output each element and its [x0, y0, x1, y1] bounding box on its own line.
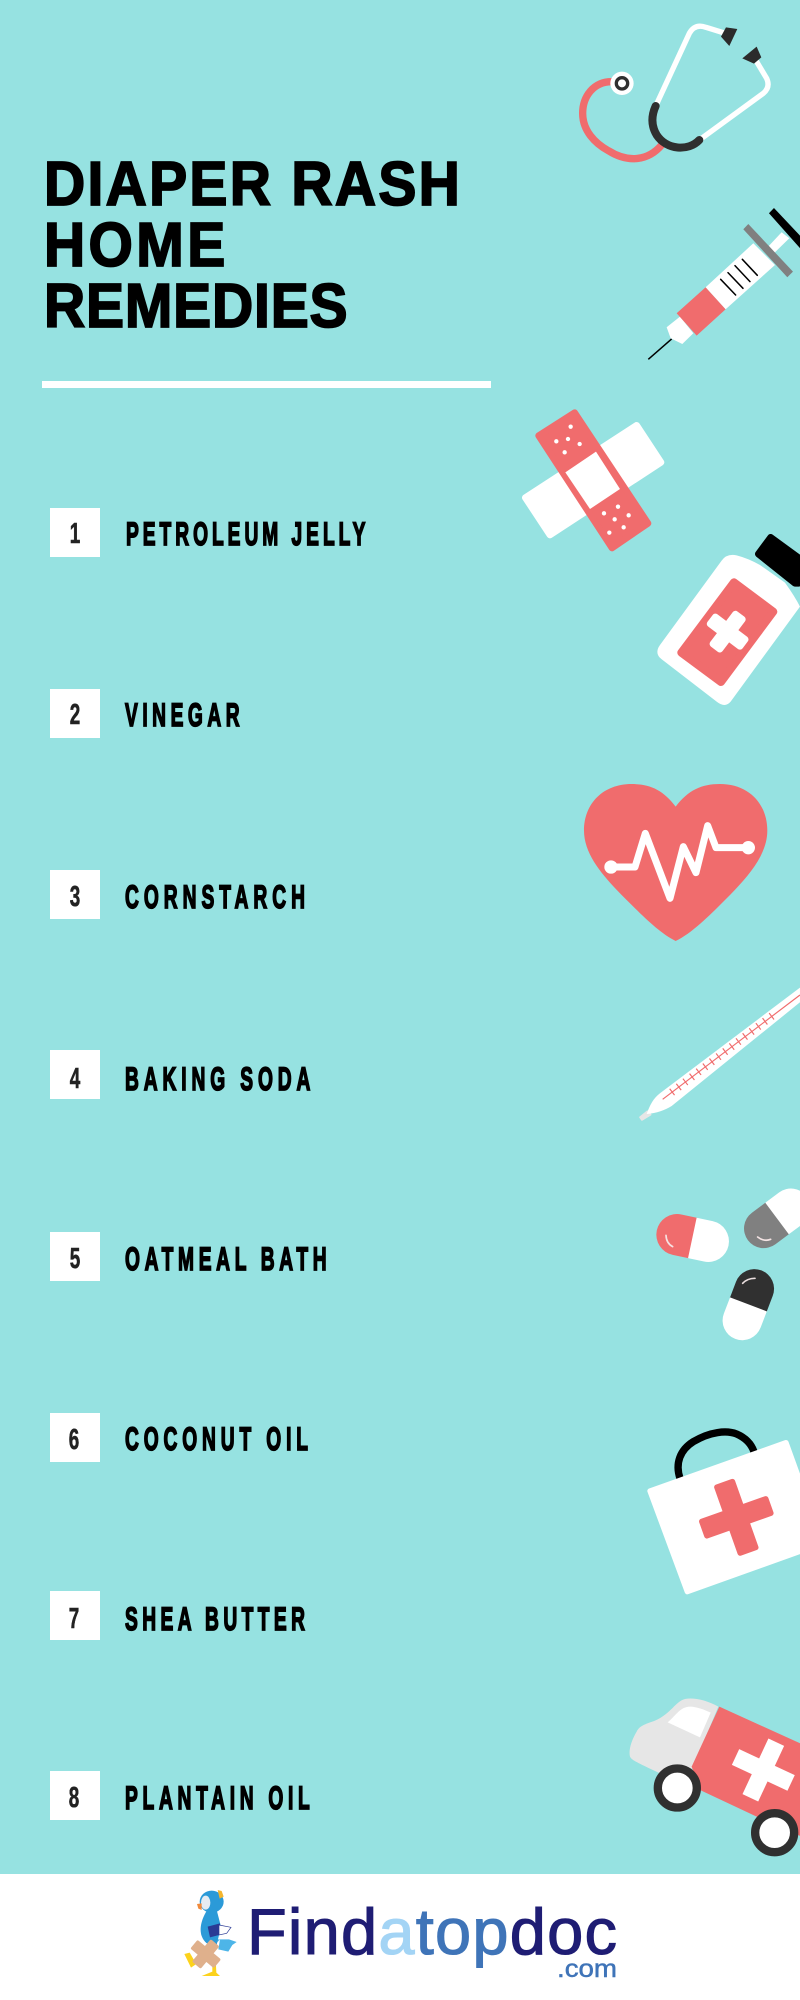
pill: grey and white: [736, 1181, 800, 1256]
list item 4: 4: [70, 1063, 81, 1095]
icon: bandage: [525, 413, 661, 548]
pill: red and white: [652, 1210, 733, 1266]
title: REMEDIES: [44, 271, 348, 341]
pill highlight: black: [743, 1278, 755, 1283]
title: HOME: [44, 210, 225, 280]
list item 8: PLANTAIN OIL: [125, 1780, 310, 1816]
list item 1: [50, 508, 366, 557]
list item 4: BAKING SODA: [125, 1061, 310, 1097]
icon: stethoscope: [583, 26, 768, 159]
list item 7: SHEA BUTTER: [125, 1601, 305, 1637]
icon: medicine bottle: [657, 537, 800, 705]
pill: black and white: [717, 1263, 780, 1346]
pill highlight: red: [666, 1235, 673, 1247]
list item 3: [50, 870, 305, 919]
list item 8: [50, 1771, 310, 1820]
list item 7: [50, 1591, 305, 1640]
list item 5: [50, 1232, 327, 1281]
list item 8: 8: [69, 1782, 79, 1814]
list item 2: 2: [70, 699, 80, 731]
list item 5: 5: [70, 1243, 80, 1275]
list item 2: VINEGAR: [125, 697, 240, 733]
list item 6: [50, 1413, 308, 1462]
icon: ambulance: [630, 1699, 800, 1852]
pill highlight: grey: [758, 1237, 771, 1240]
list item 1: PETROLEUM JELLY: [126, 516, 366, 552]
list item 1: 1: [70, 518, 80, 550]
logo domain suffix: .com: [557, 1955, 617, 1983]
title: DIAPER RASH: [44, 149, 460, 219]
list item 6: 6: [69, 1424, 79, 1456]
icon: first aid kit: [650, 1432, 800, 1592]
footer band: [0, 1874, 800, 2000]
list item 7: 7: [69, 1603, 79, 1635]
logo wordmark: Findatopdoc: [247, 1895, 617, 1968]
icon: heart with pulse: [584, 784, 767, 941]
list item 3: 3: [70, 881, 80, 913]
title: [44, 149, 460, 341]
icon: thermometer: [640, 988, 800, 1120]
list item 3: CORNSTARCH: [125, 879, 305, 915]
icon: syringe: [648, 208, 800, 359]
list item 6: COCONUT OIL: [125, 1421, 308, 1457]
list item 4: [50, 1050, 310, 1099]
list item 2: [50, 689, 240, 738]
title underline: [42, 381, 491, 388]
list item 5: OATMEAL BATH: [125, 1241, 327, 1277]
logo mascot: duck: [184, 1890, 237, 1976]
icon: pills: [652, 1181, 800, 1346]
